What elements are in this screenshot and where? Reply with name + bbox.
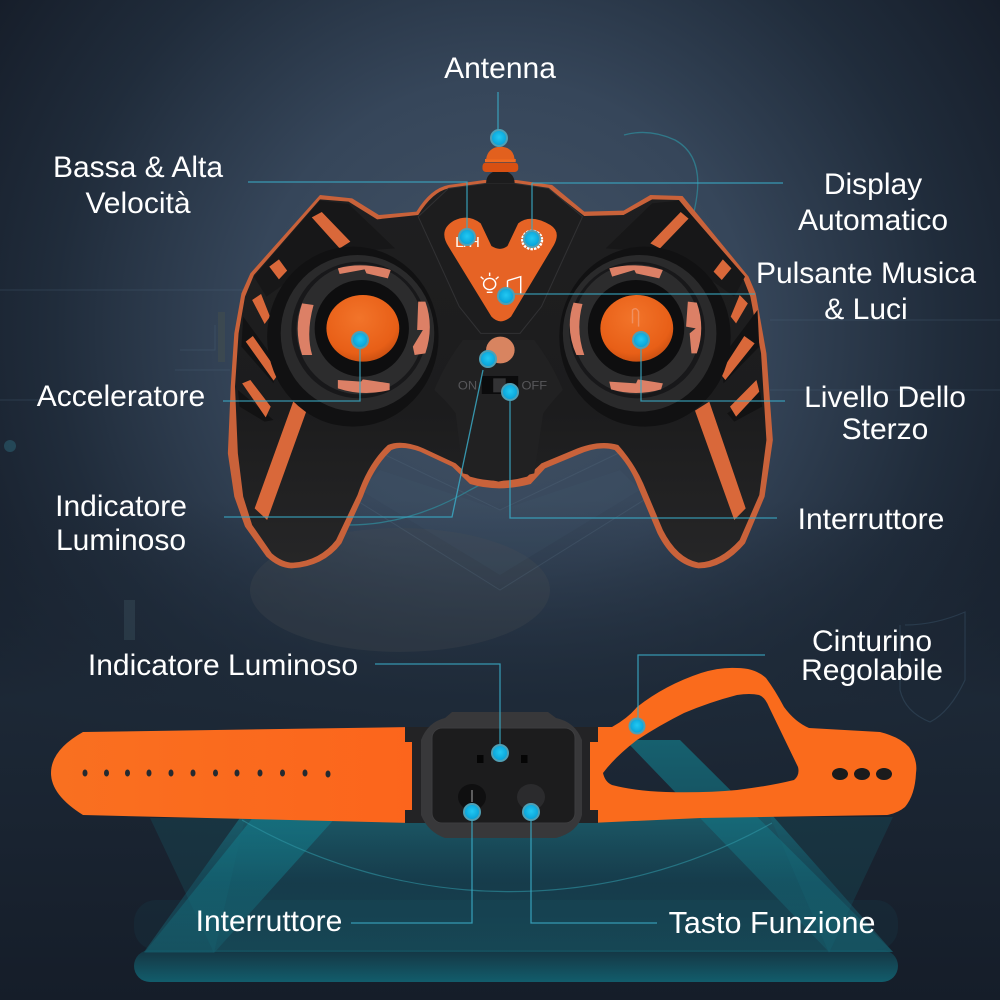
label: Indicatore Luminoso (controller): Luminoso (56, 524, 186, 557)
V shaped orange panel (444, 218, 557, 321)
shoulder panels (254, 201, 395, 297)
label: Indicatore Luminoso (strap): Indicatore Luminoso (88, 649, 358, 682)
label: Livello Dello Sterzo (804, 381, 966, 446)
label: Tasto Funzione: Tasto Funzione (669, 906, 875, 940)
orange stripes right (650, 212, 759, 417)
label: Pulsante Musica & Luci: & Luci (824, 293, 908, 326)
label: Indicatore Luminoso (controller) (55, 490, 187, 557)
label: Display Automatico: Automatico (798, 204, 948, 237)
strap left band (51, 727, 412, 823)
upper centre panel (418, 183, 582, 333)
orange stripes left (242, 212, 350, 417)
watch case (405, 712, 598, 838)
label: Interruttore (strap): Interruttore (196, 905, 342, 938)
label: Antenna: Antenna (444, 52, 556, 85)
right joystick (559, 247, 731, 427)
label: Pulsante Musica & Luci (756, 257, 976, 326)
label: Livello Dello Sterzo: Livello Dello (804, 381, 966, 414)
controller black body (235, 183, 766, 563)
right knob (600, 295, 673, 362)
label: Livello Dello Sterzo: Sterzo (842, 413, 928, 446)
label: Bassa & Alta Velocità: Bassa & Alta (53, 151, 223, 184)
teal light beams under strap (134, 740, 898, 982)
strap studs right (832, 768, 892, 780)
label: Display Automatico: Display (824, 168, 922, 201)
lower centre lobe (434, 340, 563, 482)
label: Bassa & Alta Velocità (53, 151, 223, 220)
label: Bassa & Alta Velocità: Velocità (85, 187, 191, 220)
function button (517, 784, 545, 810)
ON/OFF switch: OFF (521, 379, 548, 393)
label: Acceleratore: Acceleratore (37, 380, 205, 413)
controller (228, 147, 773, 568)
strap (51, 668, 916, 838)
V shaped orange panel: L/H (455, 234, 480, 251)
label: Display Automatico (798, 168, 948, 237)
peach button (486, 337, 515, 363)
controller orange outline (228, 180, 773, 568)
label: Indicatore Luminoso (controller): Indicatore (55, 490, 187, 523)
left joystick (267, 247, 439, 427)
ON/OFF switch (458, 376, 548, 394)
ON/OFF switch: ON (458, 379, 477, 393)
left knob (326, 295, 399, 362)
callout lines (223, 92, 785, 923)
label: Cinturino Regolabile: Regolabile (801, 654, 943, 687)
label: Pulsante Musica & Luci: Pulsante Musica (756, 257, 976, 290)
strap holes left (82, 770, 330, 778)
label: Cinturino Regolabile (801, 625, 943, 687)
label: Cinturino Regolabile: Cinturino (812, 625, 932, 658)
label: Interruttore (controller): Interruttore (798, 503, 944, 536)
strap right loop (590, 668, 916, 823)
callout dots (352, 130, 649, 820)
antenna (482, 147, 518, 183)
power button (458, 784, 486, 810)
